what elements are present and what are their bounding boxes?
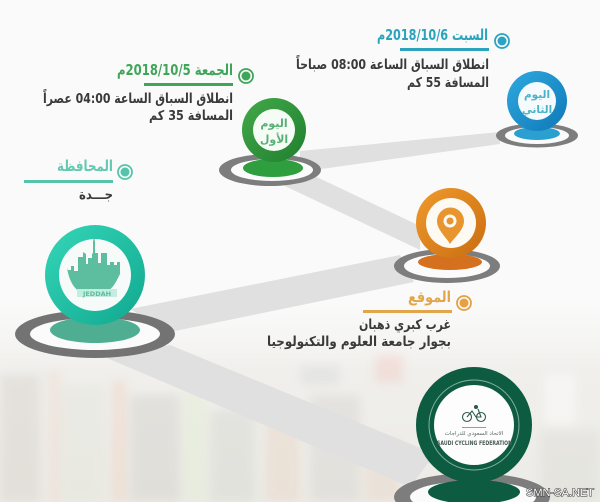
pin: second day: اليوم bbox=[524, 89, 550, 101]
icon: Jeddah skyline bbox=[67, 236, 120, 291]
path: Jeddah to federation bbox=[107, 345, 435, 487]
pin: Jeddah bbox=[15, 225, 175, 358]
pin: federation: الاتحاد السعودي للدراجات bbox=[445, 431, 504, 437]
block: governorate bbox=[24, 157, 132, 203]
block: Friday details: انطلاق السباق الساعة 04:00 عصراً bbox=[43, 88, 233, 107]
path: first day to location bbox=[262, 165, 420, 250]
pin: second day: الثاني bbox=[522, 104, 552, 116]
block: Friday details: الجمعة 2018/10/5م bbox=[117, 61, 233, 79]
watermark: SMN-SA.NET bbox=[526, 487, 594, 499]
block: Saturday details: انطلاق السباق الساعة 08:00 صباحاً bbox=[296, 54, 489, 73]
path: second day to first day bbox=[300, 132, 500, 172]
block: Saturday details: السبت 2018/10/6م bbox=[377, 26, 488, 44]
pin: first day: اليوم bbox=[260, 117, 288, 130]
block: governorate: جـــدة bbox=[79, 187, 113, 203]
block: location bbox=[267, 288, 471, 350]
icon: bicycle bbox=[462, 406, 486, 422]
background: faded cyclists photo bbox=[0, 300, 600, 502]
icon: teal bullet bbox=[118, 165, 132, 179]
block: location: الموقع bbox=[408, 288, 451, 306]
path: Jeddah to location bbox=[130, 255, 414, 332]
icon: blue bullet bbox=[495, 34, 509, 48]
pin: location bbox=[394, 188, 500, 283]
pin: federation: SAUDI CYCLING FEDERATION bbox=[437, 440, 512, 447]
pin: second day bbox=[496, 71, 578, 148]
block: Friday details bbox=[43, 61, 253, 124]
icon: location marker bbox=[437, 208, 464, 244]
block: location: بجوار جامعة العلوم والتكنولوجيا bbox=[267, 334, 451, 350]
pin: federation bbox=[394, 367, 550, 502]
icon: orange bullet bbox=[457, 296, 471, 310]
block: Friday details: المسافة 35 كم bbox=[149, 108, 233, 124]
block: Saturday details: المسافة 55 كم bbox=[407, 75, 489, 91]
pin: first day: الأول bbox=[260, 132, 288, 146]
block: Saturday details bbox=[296, 26, 509, 91]
block: location: غرب كبري ذهبان bbox=[359, 317, 451, 333]
icon: green bullet bbox=[239, 69, 253, 83]
block: governorate: المحافظة bbox=[57, 157, 113, 175]
pin: Jeddah: JEDDAH bbox=[82, 290, 111, 298]
pin: first day bbox=[219, 98, 321, 186]
